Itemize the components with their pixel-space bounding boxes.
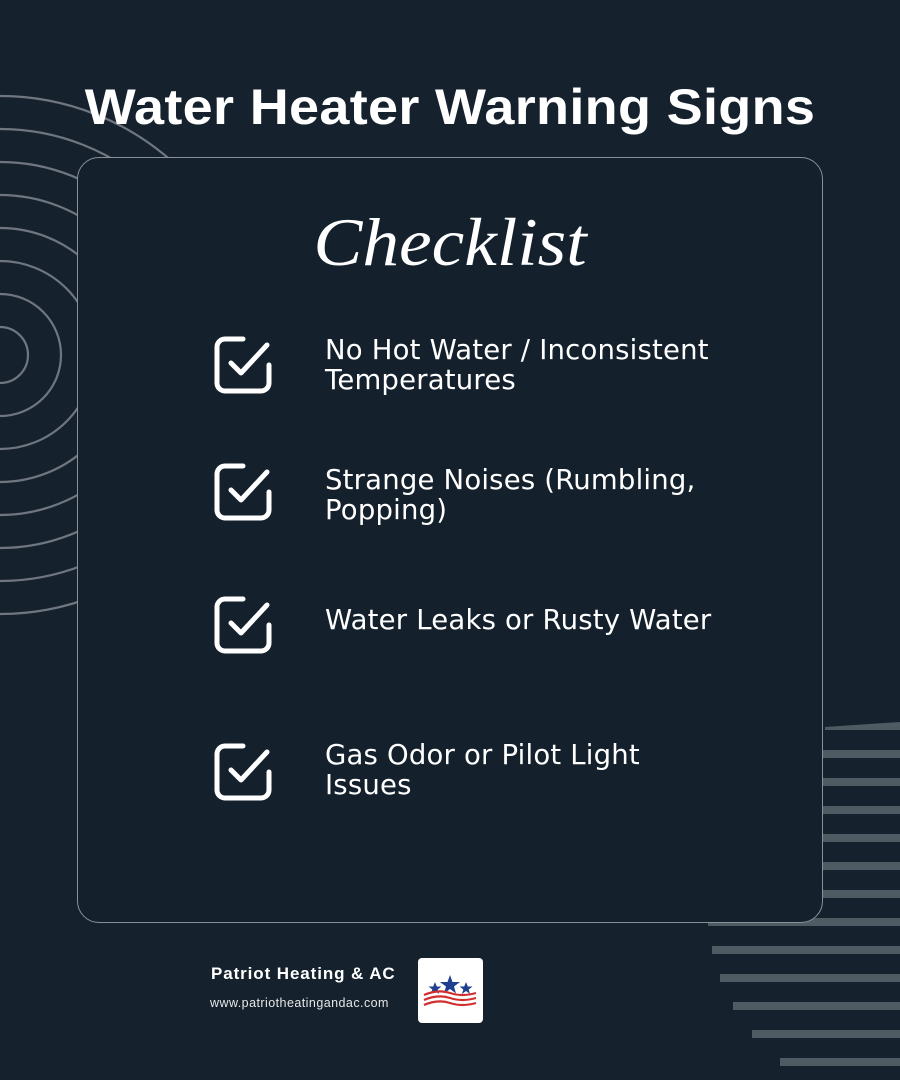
decoration: concentric circles	[0, 94, 168, 616]
panel: checklist card	[77, 157, 823, 923]
item 3: Water Leaks or Rusty Water	[325, 604, 711, 636]
item 1	[214, 334, 709, 396]
decoration: stripes	[708, 722, 900, 1066]
item 2: Popping)	[325, 494, 447, 526]
item 4	[214, 739, 640, 801]
item 2	[214, 464, 695, 526]
item 3	[214, 596, 712, 654]
footer: url: www.patriotheatingandac.com	[210, 996, 389, 1010]
item 2: Strange Noises (Rumbling,	[325, 464, 695, 496]
title: Water Heater Warning Signs	[85, 79, 815, 135]
logo	[418, 958, 483, 1023]
footer: company name: Patriot Heating & AC	[211, 964, 396, 983]
item 4: Gas Odor or Pilot Light	[325, 739, 640, 771]
item 4: Issues	[325, 769, 412, 801]
item 1: Temperatures	[325, 364, 516, 396]
item 1: No Hot Water / Inconsistent	[325, 334, 709, 366]
subtitle: Checklist: Checklist	[313, 204, 587, 280]
